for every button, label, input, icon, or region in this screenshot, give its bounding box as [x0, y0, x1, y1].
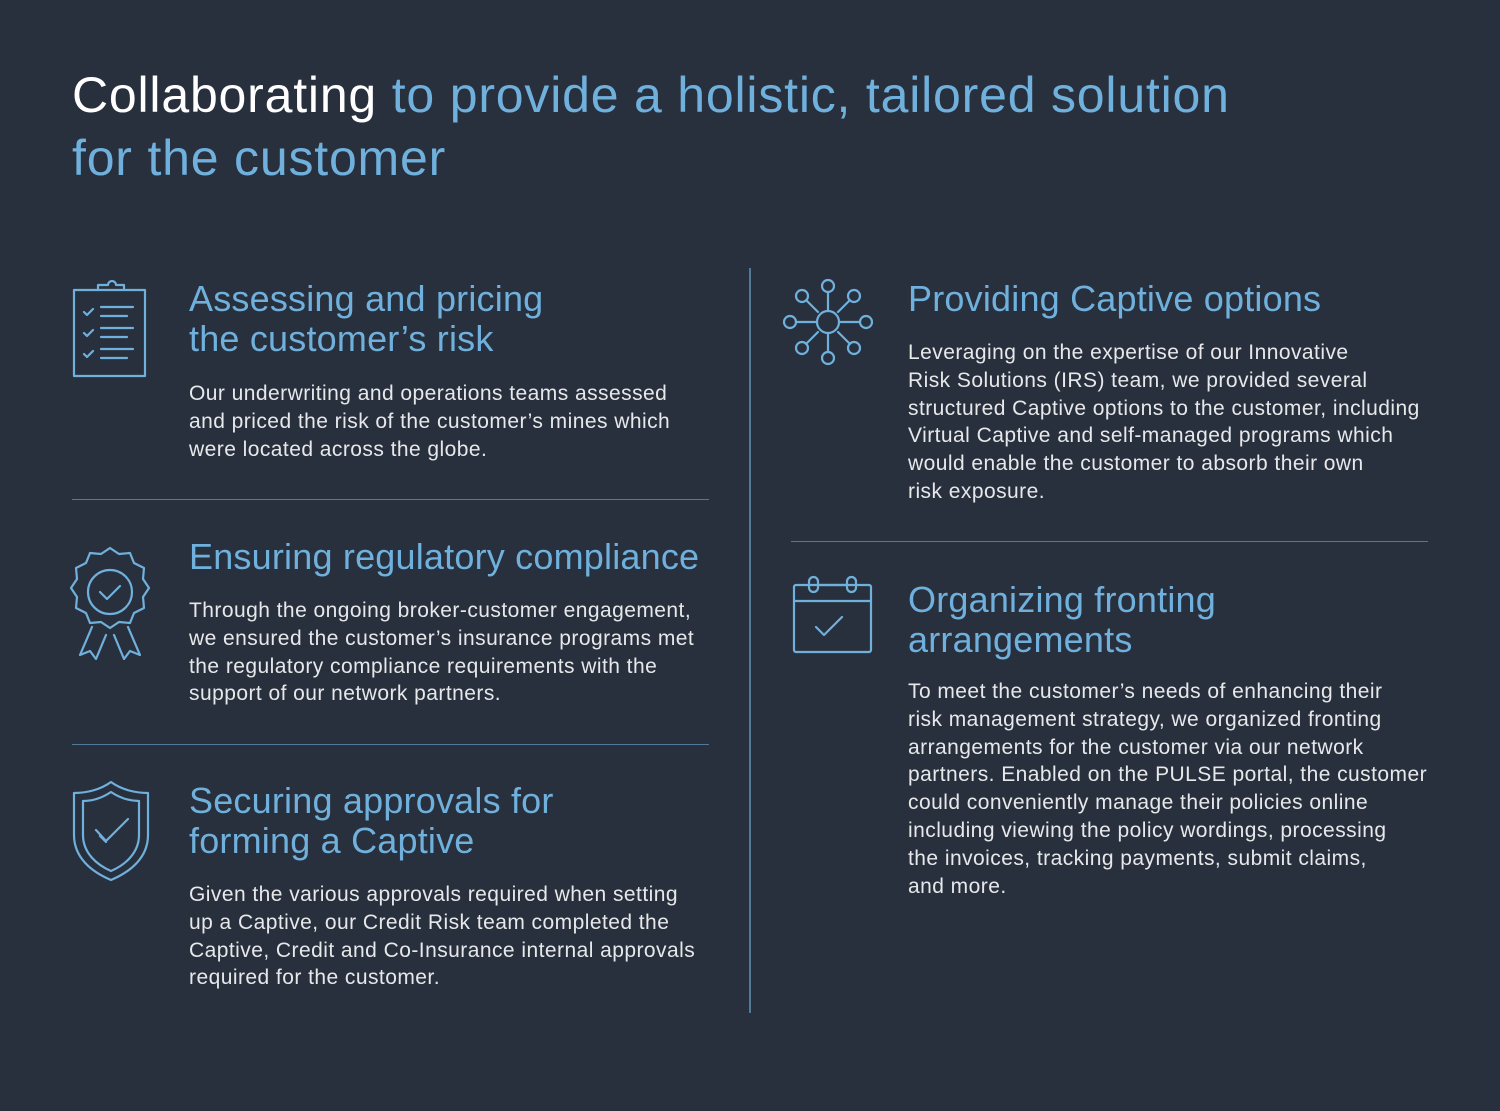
text: Through the ongoing broker-customer engagement, — [189, 599, 691, 622]
text: partners. Enabled on the PULSE portal, the customer — [908, 763, 1427, 786]
text — [908, 341, 1420, 503]
text: up a Captive, our Credit Risk team completed the — [189, 911, 669, 934]
text: Leveraging on the expertise of our Innovative — [908, 341, 1349, 364]
heading: Providing Captive options — [908, 278, 1321, 319]
text: the regulatory compliance requirements with the — [189, 655, 657, 678]
heading: forming a Captive — [189, 820, 475, 861]
heading: the customer’s risk — [189, 318, 494, 359]
text: and priced the risk of the customer’s mines which — [189, 410, 670, 433]
vertical divider — [749, 268, 751, 1013]
text: structured Captive options to the customer, including — [908, 397, 1420, 420]
text — [189, 599, 694, 705]
text: Given the various approvals required when setting — [189, 883, 678, 906]
icon: network — [782, 278, 874, 366]
heading — [189, 278, 543, 359]
text: Our underwriting and operations teams assessed — [189, 382, 667, 405]
text: we ensured the customer’s insurance programs met — [189, 627, 694, 650]
heading: Organizing fronting — [908, 579, 1216, 620]
text — [908, 680, 1427, 898]
icon: clipboard — [72, 280, 146, 378]
icon: calendar — [792, 576, 872, 654]
title: Collaborating to provide a holistic, tailored solution — [72, 67, 1230, 123]
heading: Assessing and pricing — [189, 278, 543, 319]
text — [189, 883, 695, 989]
text: To meet the customer’s needs of enhancing their — [908, 680, 1382, 703]
text: and more. — [908, 875, 1007, 898]
text: could conveniently manage their policies online — [908, 791, 1368, 814]
icon: badge — [70, 546, 150, 660]
text: would enable the customer to absorb their own — [908, 452, 1364, 475]
text: the invoices, tracking payments, submit claims, — [908, 847, 1367, 870]
title: for the customer — [72, 130, 446, 186]
panel: assessing — [72, 278, 670, 461]
heading — [189, 780, 554, 861]
text: risk exposure. — [908, 480, 1045, 503]
heading: Securing approvals for — [189, 780, 554, 821]
text — [189, 382, 670, 461]
text: required for the customer. — [189, 966, 440, 989]
text: Virtual Captive and self-managed programs which — [908, 424, 1393, 447]
panel: fronting — [792, 576, 1427, 898]
panel: approvals — [72, 780, 695, 989]
panel: captive options — [782, 278, 1420, 503]
text: arrangements for the customer via our network — [908, 736, 1364, 759]
heading — [908, 579, 1216, 660]
text: were located across the globe. — [189, 438, 487, 461]
text: Captive, Credit and Co-Insurance internal approvals — [189, 939, 695, 962]
text: risk management strategy, we organized fronting — [908, 708, 1382, 731]
panel: compliance — [70, 536, 699, 705]
heading: Ensuring regulatory compliance — [189, 536, 699, 577]
title — [72, 67, 1230, 186]
text: Risk Solutions (IRS) team, we provided several — [908, 369, 1368, 392]
icon: shield — [72, 780, 150, 882]
text: including viewing the policy wordings, processing — [908, 819, 1386, 842]
heading: arrangements — [908, 619, 1133, 660]
text: support of our network partners. — [189, 682, 501, 705]
